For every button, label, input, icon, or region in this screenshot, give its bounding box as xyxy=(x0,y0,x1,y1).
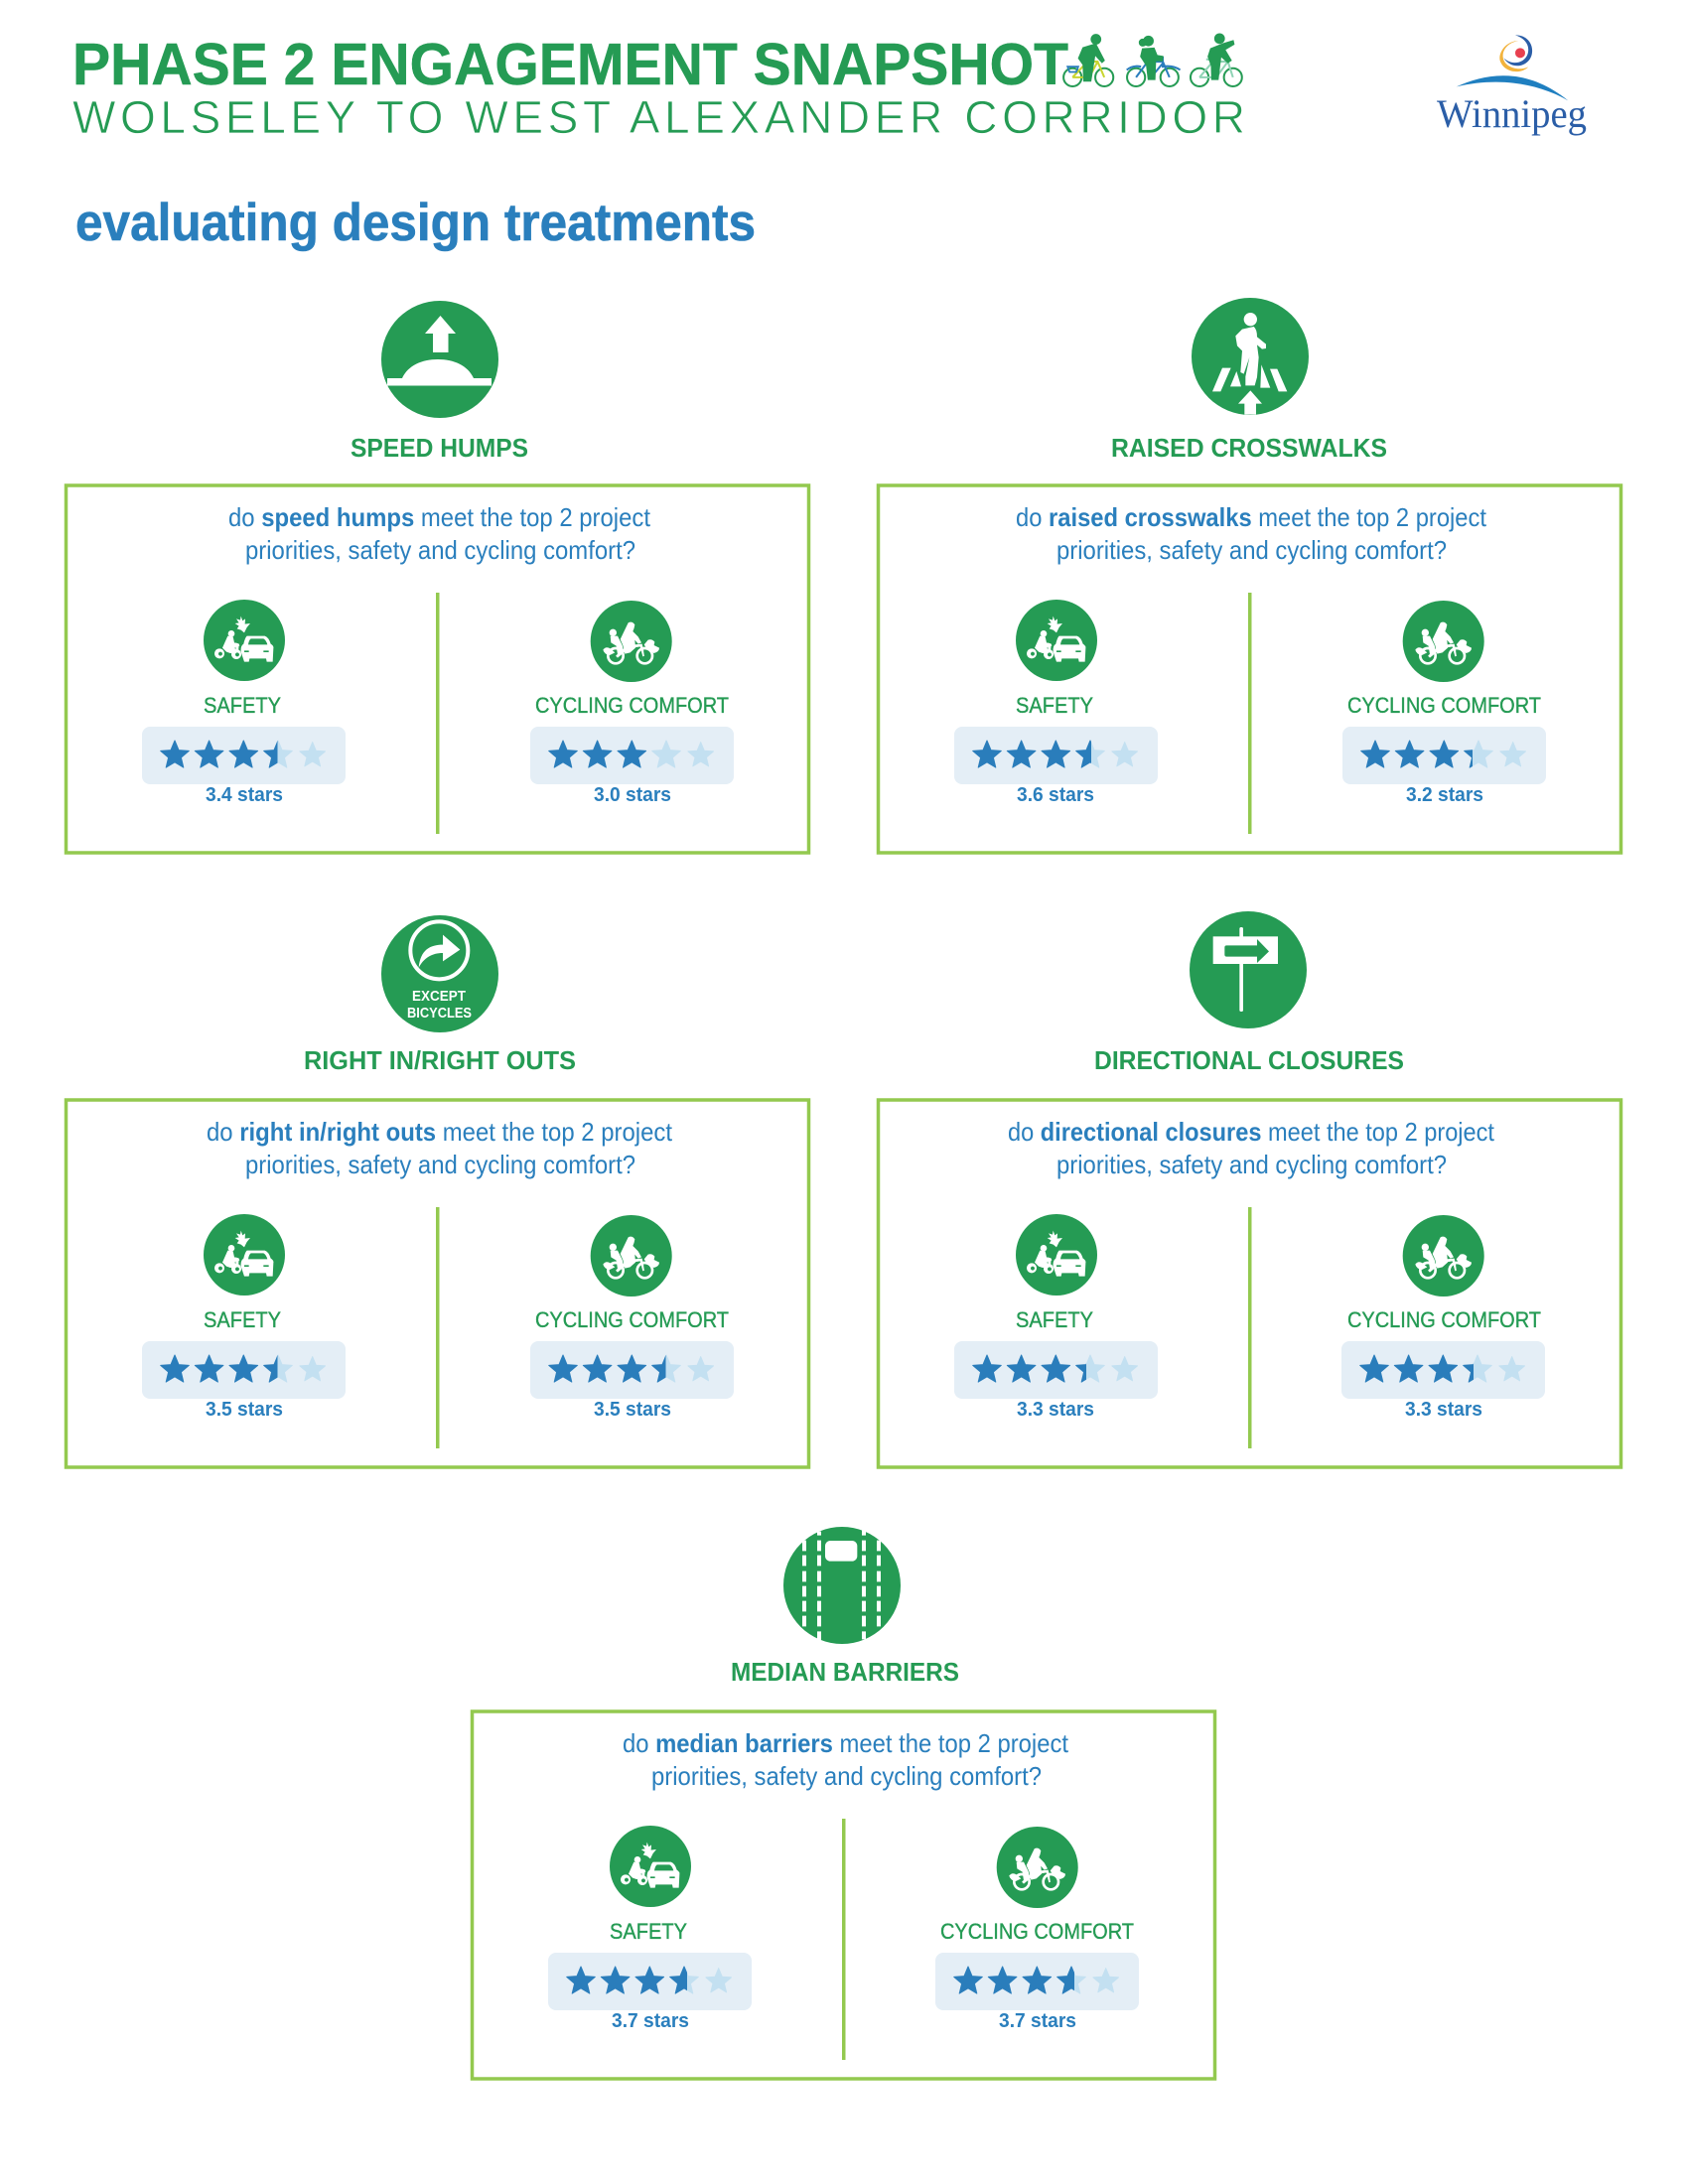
metric: safety xyxy=(142,1214,346,1421)
metric: cycling comfort xyxy=(1341,1215,1545,1421)
metric: safety: SAFETY xyxy=(204,1307,281,1332)
metric: cycling comfort: CYCLING COMFORT xyxy=(1347,1307,1541,1332)
label: raised crosswalks: RAISED CROSSWALKS xyxy=(1111,433,1387,463)
icon: right in/right outs: EXCEPT xyxy=(412,989,466,1005)
metric: cycling comfort xyxy=(935,1827,1139,2032)
icon: directional closures xyxy=(1190,911,1307,1028)
metric: safety: SAFETY xyxy=(1016,693,1093,718)
icon: raised crosswalks xyxy=(1192,298,1309,415)
panel: median barriers xyxy=(473,1711,1215,2079)
metric: cycling comfort: CYCLING COMFORT xyxy=(535,1307,729,1332)
metric: safety: SAFETY xyxy=(1016,1307,1093,1332)
metric: safety xyxy=(954,600,1158,806)
heading: evaluating design treatments: evaluating design treatments xyxy=(75,194,756,252)
panel: right in/right outs xyxy=(66,1100,808,1467)
panel: directional closures xyxy=(878,1100,1620,1467)
panel: raised crosswalks: priorities, safety and cycling comfort? xyxy=(1056,535,1447,565)
panel: raised crosswalks xyxy=(878,485,1620,853)
metric: safety: 3.3 stars xyxy=(1017,1399,1094,1421)
title: PHASE 2 ENGAGEMENT SNAPSHOT xyxy=(72,32,1068,97)
metric: cycling comfort xyxy=(530,1215,734,1421)
panel: median barriers: priorities, safety and cycling comfort? xyxy=(651,1761,1042,1791)
label: directional closures: DIRECTIONAL CLOSURES xyxy=(1094,1045,1404,1075)
label: right in/right outs: RIGHT IN/RIGHT OUTS xyxy=(304,1045,576,1075)
metric: safety: SAFETY xyxy=(204,693,281,718)
icon: median barriers xyxy=(783,1527,901,1644)
metric: safety: 3.6 stars xyxy=(1017,784,1094,806)
icon: three cyclists xyxy=(1063,33,1242,86)
metric: cycling comfort: 3.2 stars xyxy=(1406,784,1483,806)
metric: safety xyxy=(142,600,346,806)
metric: cycling comfort: CYCLING COMFORT xyxy=(940,1919,1134,1944)
metric: cycling comfort: 3.7 stars xyxy=(999,2010,1076,2032)
metric: cycling comfort: CYCLING COMFORT xyxy=(1347,693,1541,718)
icon: speed humps xyxy=(381,301,498,418)
icon: right in/right outs: BICYCLES xyxy=(407,1006,472,1022)
metric: safety xyxy=(954,1214,1158,1421)
metric: safety: 3.4 stars xyxy=(206,784,283,806)
question: do directional closures meet the top 2 project xyxy=(1008,1117,1495,1147)
metric: safety xyxy=(548,1826,752,2032)
question: do right in/right outs meet the top 2 project xyxy=(207,1117,673,1147)
panel: speed humps xyxy=(66,485,808,853)
metric: cycling comfort: 3.0 stars xyxy=(594,784,671,806)
metric: cycling comfort xyxy=(530,601,734,806)
panel: right in/right outs: priorities, safety and cycling comfort? xyxy=(245,1150,635,1179)
icon: right in/right outs xyxy=(381,915,498,1032)
metric: cycling comfort: 3.5 stars xyxy=(594,1399,671,1421)
metric: cycling comfort xyxy=(1342,601,1546,806)
question: do raised crosswalks meet the top 2 project xyxy=(1016,502,1487,532)
logo: Winnipeg: Winnipeg xyxy=(1437,91,1587,136)
question: do median barriers meet the top 2 project xyxy=(623,1728,1069,1758)
question: do speed humps meet the top 2 project xyxy=(228,502,651,532)
metric: cycling comfort: CYCLING COMFORT xyxy=(535,693,729,718)
metric: safety: 3.7 stars xyxy=(612,2010,689,2032)
logo: Winnipeg xyxy=(1437,35,1587,136)
label: median barriers: MEDIAN BARRIERS xyxy=(731,1657,959,1687)
metric: cycling comfort: 3.3 stars xyxy=(1405,1399,1482,1421)
metric: safety: SAFETY xyxy=(610,1919,687,1944)
panel: directional closures: priorities, safety and cycling comfort? xyxy=(1056,1150,1447,1179)
subtitle: WOLSELEY TO WEST ALEXANDER CORRIDOR xyxy=(72,91,1245,143)
metric: safety: 3.5 stars xyxy=(206,1399,283,1421)
panel: speed humps: priorities, safety and cycling comfort? xyxy=(245,535,635,565)
label: speed humps: SPEED HUMPS xyxy=(351,433,528,463)
